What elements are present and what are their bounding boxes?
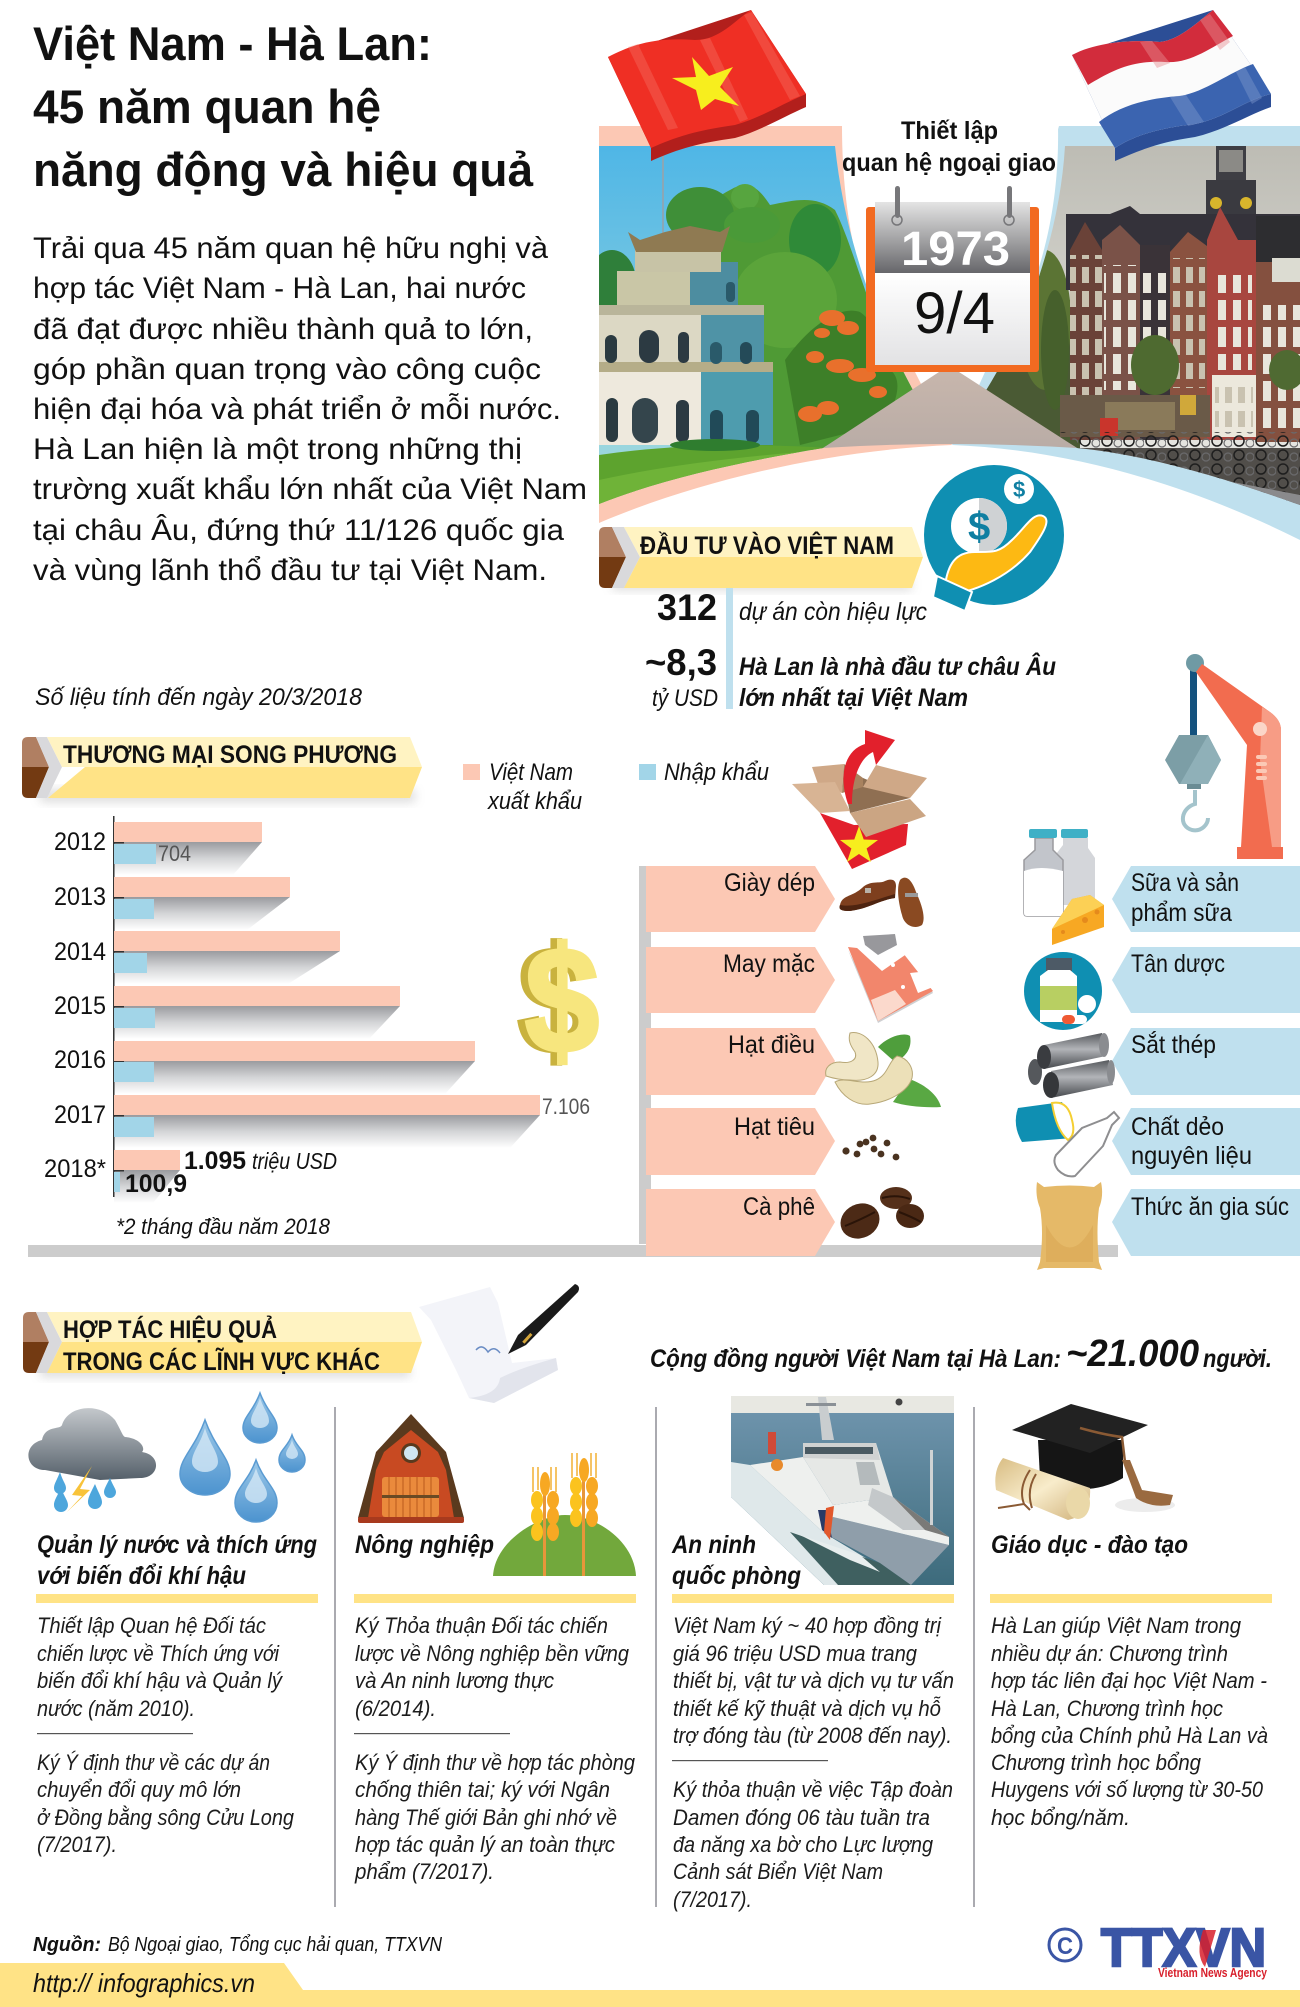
export row: cashew: Hạt điều [728,1031,815,1059]
icon: plastic cup and bottle [1016,1102,1119,1176]
import row: plastics: Chất dẻo [1131,1113,1224,1141]
icon: calendar 1973 9/4: 9/4 [914,281,995,346]
text: education details: Chương trình học bổng [991,1750,1202,1775]
source line: Bộ Ngoại giao, Tổng cục hải quan, TTXVN [108,1934,442,1956]
heading: water management: Quản lý nước và thích ứng [37,1531,317,1559]
community statement [650,1333,1272,1375]
text: education details: bổng của Chính phủ Hà Lan và [991,1723,1268,1748]
chart footnote: *2 tháng đầu năm 2018 [116,1214,331,1239]
text: security details [672,1613,954,1912]
accent bar [354,1594,636,1603]
text: education details: Hà Lan, Chương trình học [991,1696,1223,1721]
legend: Vietnam exports: xuất khẩu [487,788,582,815]
photo: Amsterdam canal houses [980,146,1300,510]
bar chart: bilateral trade 2012-2018 [44,816,590,1203]
title: năng động và hiệu quả [33,143,534,196]
import row: dairy: phẩm sữa [1131,899,1232,927]
text: security details: Cảnh sát Biển Việt Nam [673,1859,883,1884]
text: security details: (7/2017). [673,1887,752,1912]
text: education details: học bổng/năm. [991,1805,1130,1830]
export row: garments: May mặc [723,950,815,978]
icon: cashews [826,1033,941,1107]
legend: Vietnam exports: Việt Nam [489,759,573,786]
data date note: Số liệu tính đến ngày 20/3/2018 [35,684,363,711]
text: education details: Hà Lan giúp Việt Nam trong [991,1613,1242,1638]
icon: hand with coins [924,465,1064,611]
text: agriculture details: Ký Thỏa thuận Đối tác chiến [355,1613,608,1638]
import row: steel: Sắt thép [1131,1030,1216,1059]
heading: security and defence [671,1531,801,1590]
bar chart: bilateral trade 2012-2018: 100,9 [125,1170,187,1198]
text: water management details [37,1613,295,1857]
text: water management details: (7/2017). [37,1832,117,1857]
heading: diplomatic relations: Thiết lập [901,117,998,145]
intro text block: Trải qua 45 năm quan hệ hữu nghị và [33,232,548,265]
intro text block: hiện đại hóa và phát triển ở mỗi nước. [33,393,561,426]
heading banner: effective cooperation [23,1312,422,1377]
footer band with URL: http:// infographics.vn [33,1968,255,1998]
legend: Vietnam exports [463,759,582,815]
star on Vietnam flag [672,57,739,110]
heading: security and defence: quốc phòng [672,1562,801,1590]
investment stats: lớn nhất tại Việt Nam [739,684,968,712]
baseline divider [28,1245,1118,1257]
export row: pepper [646,1108,835,1175]
text: security details: thiết kế kỹ thuật và dịch vụ hỗ [673,1696,941,1721]
text: security details: đa năng xa bờ cho Lực lượng [673,1832,934,1857]
text: security details: giá 96 triệu USD mua trang [673,1641,918,1666]
export row: pepper: Hạt tiêu [734,1113,815,1141]
heading banner: effective cooperation: TRONG CÁC LĨNH VỰC KHÁC [63,1346,380,1376]
intro text block: hợp tác Việt Nam - Hà Lan, hai nước [33,272,526,305]
bar chart: bilateral trade 2012-2018: 2013 [54,883,106,911]
column dividers [334,1407,975,1907]
bar chart: bilateral trade 2012-2018: 2015 [54,992,106,1020]
text: education details [991,1613,1268,1830]
icon: peppercorns [842,1135,899,1160]
community statement: ~21.000 [1066,1333,1199,1375]
icon: feed sack [1036,1182,1102,1270]
bar chart: bilateral trade 2012-2018: 2018* [44,1155,106,1183]
photo: coast guard ship [731,1396,954,1585]
text: security details: Việt Nam ký ~ 40 hợp đồng trị [673,1613,942,1638]
investment stats [645,587,1056,712]
import row: dairy: Sữa và sản [1131,869,1239,897]
title: Việt Nam - Hà Lan: [33,17,432,70]
crane illustration [1165,654,1283,859]
panel: white shield centre [842,126,1058,372]
export row: coffee: Cà phê [743,1193,815,1221]
banner: invest in Vietnam: ĐẦU TƯ VÀO VIỆT NAM [640,530,894,560]
bar chart: bilateral trade 2012-2018: 2017 [54,1101,106,1129]
text: water management details: chuyển đổi quy mô lớn [37,1777,241,1802]
text: water management details: chiến lược về Thích ứng với [37,1641,280,1666]
text: agriculture details: Ký Ý định thư về hợp tác phòng [355,1750,636,1775]
heading: security and defence: An ninh [671,1531,756,1559]
heading: water management [37,1531,317,1590]
heading: education and training: Giáo dục - đào tạo [991,1531,1188,1559]
bar chart: bilateral trade 2012-2018: triệu USD [252,1148,337,1174]
text: education details: Huygens với số lượng từ 30-50 [991,1777,1264,1802]
text: water management details: Ký Ý định thư về các dự án [37,1750,270,1775]
icon: gold dollar sign: $ [518,916,594,1084]
import row: animal feed [1112,1189,1300,1256]
panel: taupe stand under calendar [823,372,1077,448]
panel: exports list [639,866,835,1256]
heading: agriculture: Nông nghiệp [355,1531,494,1559]
bar chart: bilateral trade 2012-2018: 2012 [54,828,106,856]
bar chart: bilateral trade 2012-2018: 2016 [54,1046,106,1074]
intro text block: đã đạt được nhiều thành quả to lớn, [33,313,533,346]
icon: storm cloud [28,1408,156,1512]
intro text block: trường xuất khẩu lớn nhất của Việt Nam [33,473,587,506]
community statement: người. [1203,1345,1272,1373]
text: water management details: ở Đồng bằng sông Cửu Long [37,1805,295,1830]
intro text block: và vùng lãnh thổ đầu tư tại Việt Nam. [33,554,547,587]
text: agriculture details: lược về Nông nghiệp bền vững [355,1641,630,1666]
accent bar [672,1594,954,1603]
text: security details: thiết bị, vật tư và dịch vụ tư vấn [673,1668,954,1693]
import row: pharmaceuticals [1112,947,1300,1013]
logo: TTXVN Vietnam News Agency: Vietnam News Agency [1158,1965,1268,1980]
flag: Netherlands [1072,10,1271,161]
icon: hand with coins: $ [968,505,990,549]
panel: salmon frame Vietnam side [599,126,952,523]
logo: TTXVN Vietnam News Agency: TTXVN [1101,1918,1266,1978]
accent bar [990,1594,1272,1603]
export row: garments [646,947,835,1013]
icon: wheat field [493,1453,636,1576]
import row: plastics: nguyên liệu [1131,1142,1252,1170]
text: agriculture details: hợp tác quản lý an toàn thực [355,1832,615,1857]
icon: steel pipes [1028,1033,1115,1098]
community statement: Cộng đồng người Việt Nam tại Hà Lan: [650,1345,1061,1373]
intro text block: tại châu Âu, đứng thứ 11/126 quốc gia [33,514,564,547]
icon: barn [358,1414,464,1523]
intro text block: Hà Lan hiện là một trong những thị [33,433,522,466]
panel: blue frame Netherlands side [952,126,1300,540]
icon: graduation cap and diploma [995,1404,1175,1520]
export row: coffee [646,1189,835,1256]
bar chart: bilateral trade 2012-2018: 7.106 [542,1094,590,1119]
text: agriculture details: (6/2014). [355,1696,436,1721]
accent bar [36,1594,318,1603]
logo: TTXVN Vietnam News Agency: C [1057,1933,1073,1960]
heading: diplomatic relations [842,117,1056,177]
text: education details: nhiều dự án: Chương trình [991,1641,1228,1666]
text: water management details: nước (năm 2010). [37,1696,195,1721]
import row: pharmaceuticals: Tân dược [1131,950,1225,978]
export row: footwear: Giày dép [724,869,815,897]
bar chart: bilateral trade 2012-2018: 1.095 [184,1147,246,1175]
import row: steel [1112,1028,1300,1095]
heading banner: bilateral trade [22,737,422,802]
icon: scroll and fountain pen [419,1284,579,1403]
heading: diplomatic relations: quan hệ ngoại giao [842,149,1056,177]
intro text block [33,232,587,587]
bar chart: bilateral trade 2012-2018: 704 [158,841,191,866]
heading banner: effective cooperation: HỢP TÁC HIỆU QUẢ [63,1314,277,1344]
text: agriculture details: phẩm (7/2017). [354,1859,494,1884]
export row: cashew [646,1028,835,1095]
icon: folded shirt [848,933,933,1023]
text: agriculture details [354,1613,636,1884]
icon: hand with coins: $ [1013,477,1025,502]
investment stats: Hà Lan là nhà đầu tư châu Âu [739,651,1056,681]
icon: shoes [839,878,924,927]
text: education details: hợp tác liên đại học Việt Nam - [991,1668,1267,1693]
import row: dairy [1112,866,1300,932]
title [33,17,534,196]
investment stats: tỷ USD [652,685,718,712]
bar chart: bilateral trade 2012-2018: 2014 [54,938,106,966]
import row: plastics [1112,1108,1300,1175]
icon: medicine bottle [1024,952,1102,1030]
title: 45 năm quan hệ [33,80,381,133]
investment stats: ~8,3 [645,642,717,683]
export row: footwear [646,866,835,932]
investment stats: dự án còn hiệu lực [739,598,927,626]
heading banner: bilateral trade: THƯƠNG MẠI SONG PHƯƠNG [63,741,397,769]
flag: Vietnam [608,10,806,161]
icon: calendar 1973 9/4: 1973 [901,223,1010,276]
legend: imports: Nhập khẩu [664,759,769,786]
banner: invest in Vietnam [599,527,923,590]
icon: water drops [180,1393,305,1522]
panel: imports list [1112,866,1300,1256]
text: water management details: Thiết lập Quan hệ Đối tác [37,1613,266,1638]
photo: Hoan Kiem turtle tower [588,146,930,510]
icon: gold dollar sign: $ [525,916,599,1084]
icon: coffee beans [835,1187,924,1245]
footer band with URL [0,1963,1300,2007]
text: security details: trợ đóng tàu (từ 2008 đến nay). [673,1723,952,1748]
text: agriculture details: và An ninh lương thực [355,1668,554,1693]
text: agriculture details: chống thiên tai; ký với Ngân [355,1777,610,1802]
text: water management details: biến đổi khí hậu và Quản lý [37,1668,284,1693]
text: security details: Damen đóng 06 tàu tuần tra [673,1805,930,1830]
heading: water management: với biến đổi khí hậu [37,1562,246,1590]
icon: calendar 1973 9/4 [866,186,1039,372]
intro text block: góp phần quan trọng vào công cuộc [33,353,541,386]
source line: Nguồn: [33,1934,101,1956]
investment stats: 312 [657,587,717,628]
icon: export box with arrow [792,730,927,869]
icon: milk bottles and cheese [1024,829,1104,945]
text: agriculture details: hàng Thế giới Bản ghi nhớ về [355,1805,617,1830]
text: security details: Ký thỏa thuận về việc Tập đoàn [673,1777,953,1802]
